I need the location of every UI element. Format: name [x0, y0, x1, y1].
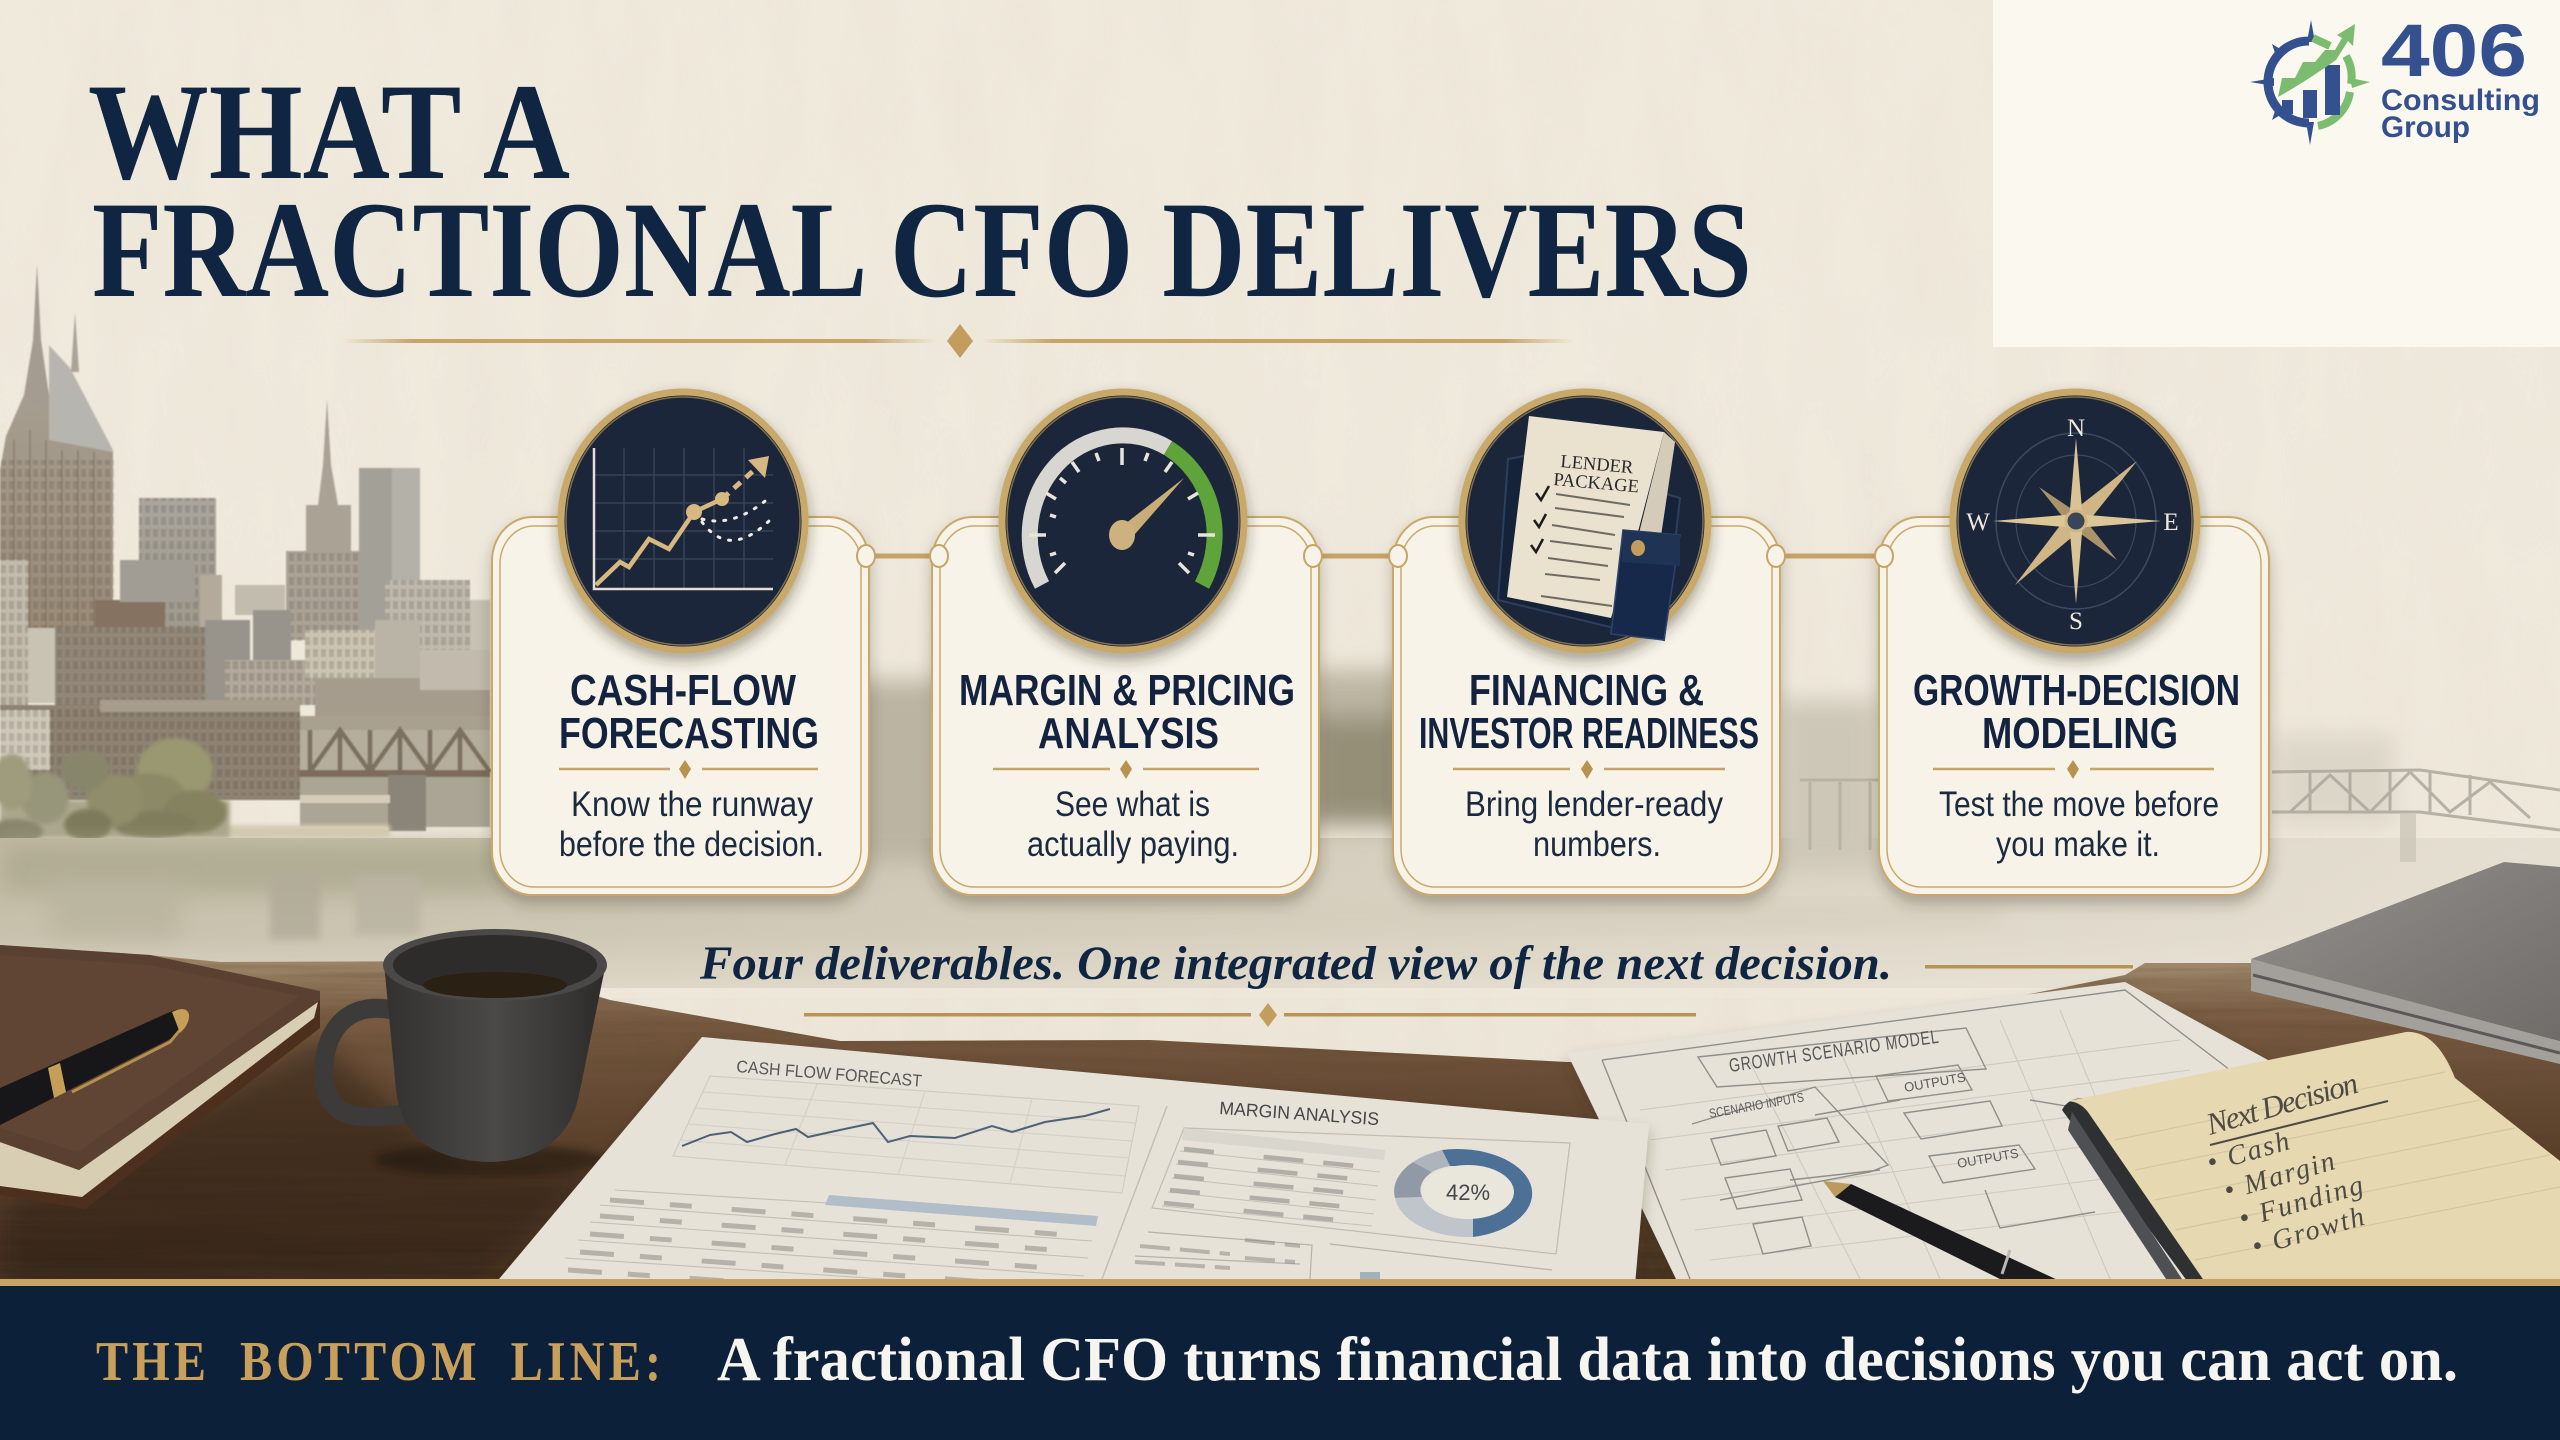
card divider — [1933, 768, 2214, 770]
connector nodes — [1389, 545, 1785, 567]
bottom line banner — [0, 1279, 2560, 1440]
card divider — [993, 768, 1259, 770]
card heading: FINANCING & — [1469, 666, 1704, 715]
card: margin and pricing analysis — [930, 517, 1322, 895]
margin table — [1135, 1128, 1570, 1282]
donut chart: 42% — [1446, 1180, 1490, 1205]
icon: lender package disc: PACKAGE — [1553, 470, 1640, 497]
connector node — [857, 545, 875, 567]
compass letters — [1966, 415, 2179, 635]
skyline: iron truss bridge — [300, 716, 490, 831]
logo wordmark: Consulting — [2381, 84, 2540, 117]
card body — [1465, 785, 1723, 864]
logo wordmark: Group — [2381, 111, 2470, 144]
card body — [1027, 785, 1239, 864]
card: cash-flow forecasting — [492, 517, 875, 895]
scenario flow labels: OUTPUTS — [1956, 1145, 2020, 1171]
card body — [1939, 785, 2219, 864]
notepad handwriting: Next Decision — [2201, 1065, 2364, 1142]
compass letters: S — [2069, 608, 2083, 635]
notepad handwriting: • Funding — [2235, 1169, 2369, 1235]
icon: cash-flow chart disc — [561, 392, 805, 650]
card heading — [1913, 666, 2240, 758]
banner statement: A fractional CFO turns financial data into decisions you can act on. — [717, 1326, 2458, 1394]
skyline: riverfront row — [0, 700, 300, 800]
card body — [559, 785, 824, 864]
forecast chart: CASH FLOW FORECAST — [736, 1057, 923, 1091]
card heading: MODELING — [1982, 709, 2178, 758]
logo panel — [1993, 0, 2560, 347]
card heading: CASH-FLOW — [570, 666, 796, 715]
desk shadow under notebook and mug — [0, 1040, 600, 1279]
tagline side rule — [1925, 965, 2133, 968]
river — [0, 838, 2560, 998]
scenario flow labels — [1708, 1069, 2020, 1171]
pen on notebook — [0, 1009, 189, 1125]
compass letters: N — [2067, 415, 2085, 442]
card heading: INVESTOR READINESS — [1419, 709, 1759, 758]
title divider — [343, 324, 1574, 358]
card: growth-decision modeling — [1875, 517, 2269, 895]
card body: See what is — [1055, 785, 1210, 824]
card: financing and investor readiness — [1389, 517, 1785, 895]
card heading — [559, 666, 819, 758]
compass letters: W — [1966, 509, 1990, 536]
logo wordmark: 406 — [2381, 9, 2527, 92]
connector nodes — [930, 545, 1322, 567]
card body: Bring lender-ready — [1465, 785, 1723, 824]
sheet heading: GROWTH SCENARIO MODEL — [1728, 1027, 1941, 1077]
connectors between cards — [870, 554, 1880, 558]
icon: lender package disc — [1462, 392, 1708, 650]
notepad handwriting: • Margin — [2220, 1145, 2340, 1207]
card divider — [559, 768, 818, 770]
notebook — [0, 945, 320, 1209]
next decision notepad — [2062, 1032, 2560, 1285]
notepad handwriting: • Cash — [2203, 1125, 2295, 1179]
faint sheet grid — [1640, 1010, 2220, 1279]
skyline towers: centre group — [120, 399, 490, 690]
connector node — [1875, 545, 1893, 567]
card heading: MARGIN & PRICING — [959, 666, 1295, 715]
distant bridge at right — [1800, 770, 2560, 862]
compass letters: E — [2163, 509, 2179, 536]
tagline divider — [804, 1003, 1696, 1027]
scenario flow labels: SCENARIO INPUTS — [1708, 1089, 1805, 1121]
scenario model sheet — [1567, 982, 2268, 1279]
notepad handwriting — [2208, 1079, 2388, 1249]
coffee mug — [324, 929, 607, 1176]
logo wordmark — [2381, 9, 2540, 144]
card heading — [1419, 666, 1759, 758]
card heading: FORECASTING — [559, 709, 819, 758]
card body: you make it. — [1996, 825, 2160, 864]
card heading: ANALYSIS — [1038, 709, 1219, 758]
scenario flow labels: OUTPUTS — [1903, 1069, 1967, 1095]
wallet — [1611, 530, 1680, 640]
panel divider — [1102, 1106, 1167, 1279]
card body: numbers. — [1533, 825, 1661, 864]
wooden table — [0, 945, 2560, 1290]
title: WHAT A — [88, 55, 570, 208]
donut chart — [1394, 1149, 1532, 1237]
notepad handwriting: • Growth — [2248, 1201, 2370, 1263]
card divider — [1453, 768, 1725, 770]
forecast chart — [673, 1057, 1139, 1193]
banner label: THE BOTTOM LINE: — [96, 1331, 661, 1393]
distant city haze behind the cards — [850, 670, 2395, 927]
card body: before the decision. — [559, 825, 824, 864]
tagline: Four deliverables. One integrated view of the next decision. — [699, 937, 1892, 990]
logo mark — [2250, 20, 2370, 145]
card heading: GROWTH-DECISION — [1913, 666, 2240, 715]
hazy city skyline — [0, 264, 490, 831]
skyline tower: spired office tower — [0, 264, 114, 640]
icon: compass disc — [1953, 392, 2197, 650]
closed laptop — [2251, 862, 2560, 1064]
title — [88, 55, 1752, 326]
icon: lender package disc: LENDER — [1560, 452, 1635, 478]
trees on the riverbank — [0, 738, 390, 845]
card body: actually paying. — [1027, 825, 1239, 864]
title: FRACTIONAL CFO DELIVERS — [92, 173, 1752, 326]
card body: Test the move before — [1939, 785, 2219, 824]
icon: gauge disc — [1002, 392, 1244, 650]
black pen on the sheets — [1823, 1181, 2062, 1282]
margin analysis heading: MARGIN ANALYSIS — [1219, 1098, 1380, 1129]
mug handle — [324, 1008, 412, 1117]
card body: Know the runway — [571, 785, 813, 824]
forecast table — [565, 1190, 1098, 1279]
skyline: mid-rise brick blocks — [0, 560, 490, 718]
card heading — [959, 666, 1295, 758]
cash flow and margin sheet — [494, 1037, 1649, 1304]
